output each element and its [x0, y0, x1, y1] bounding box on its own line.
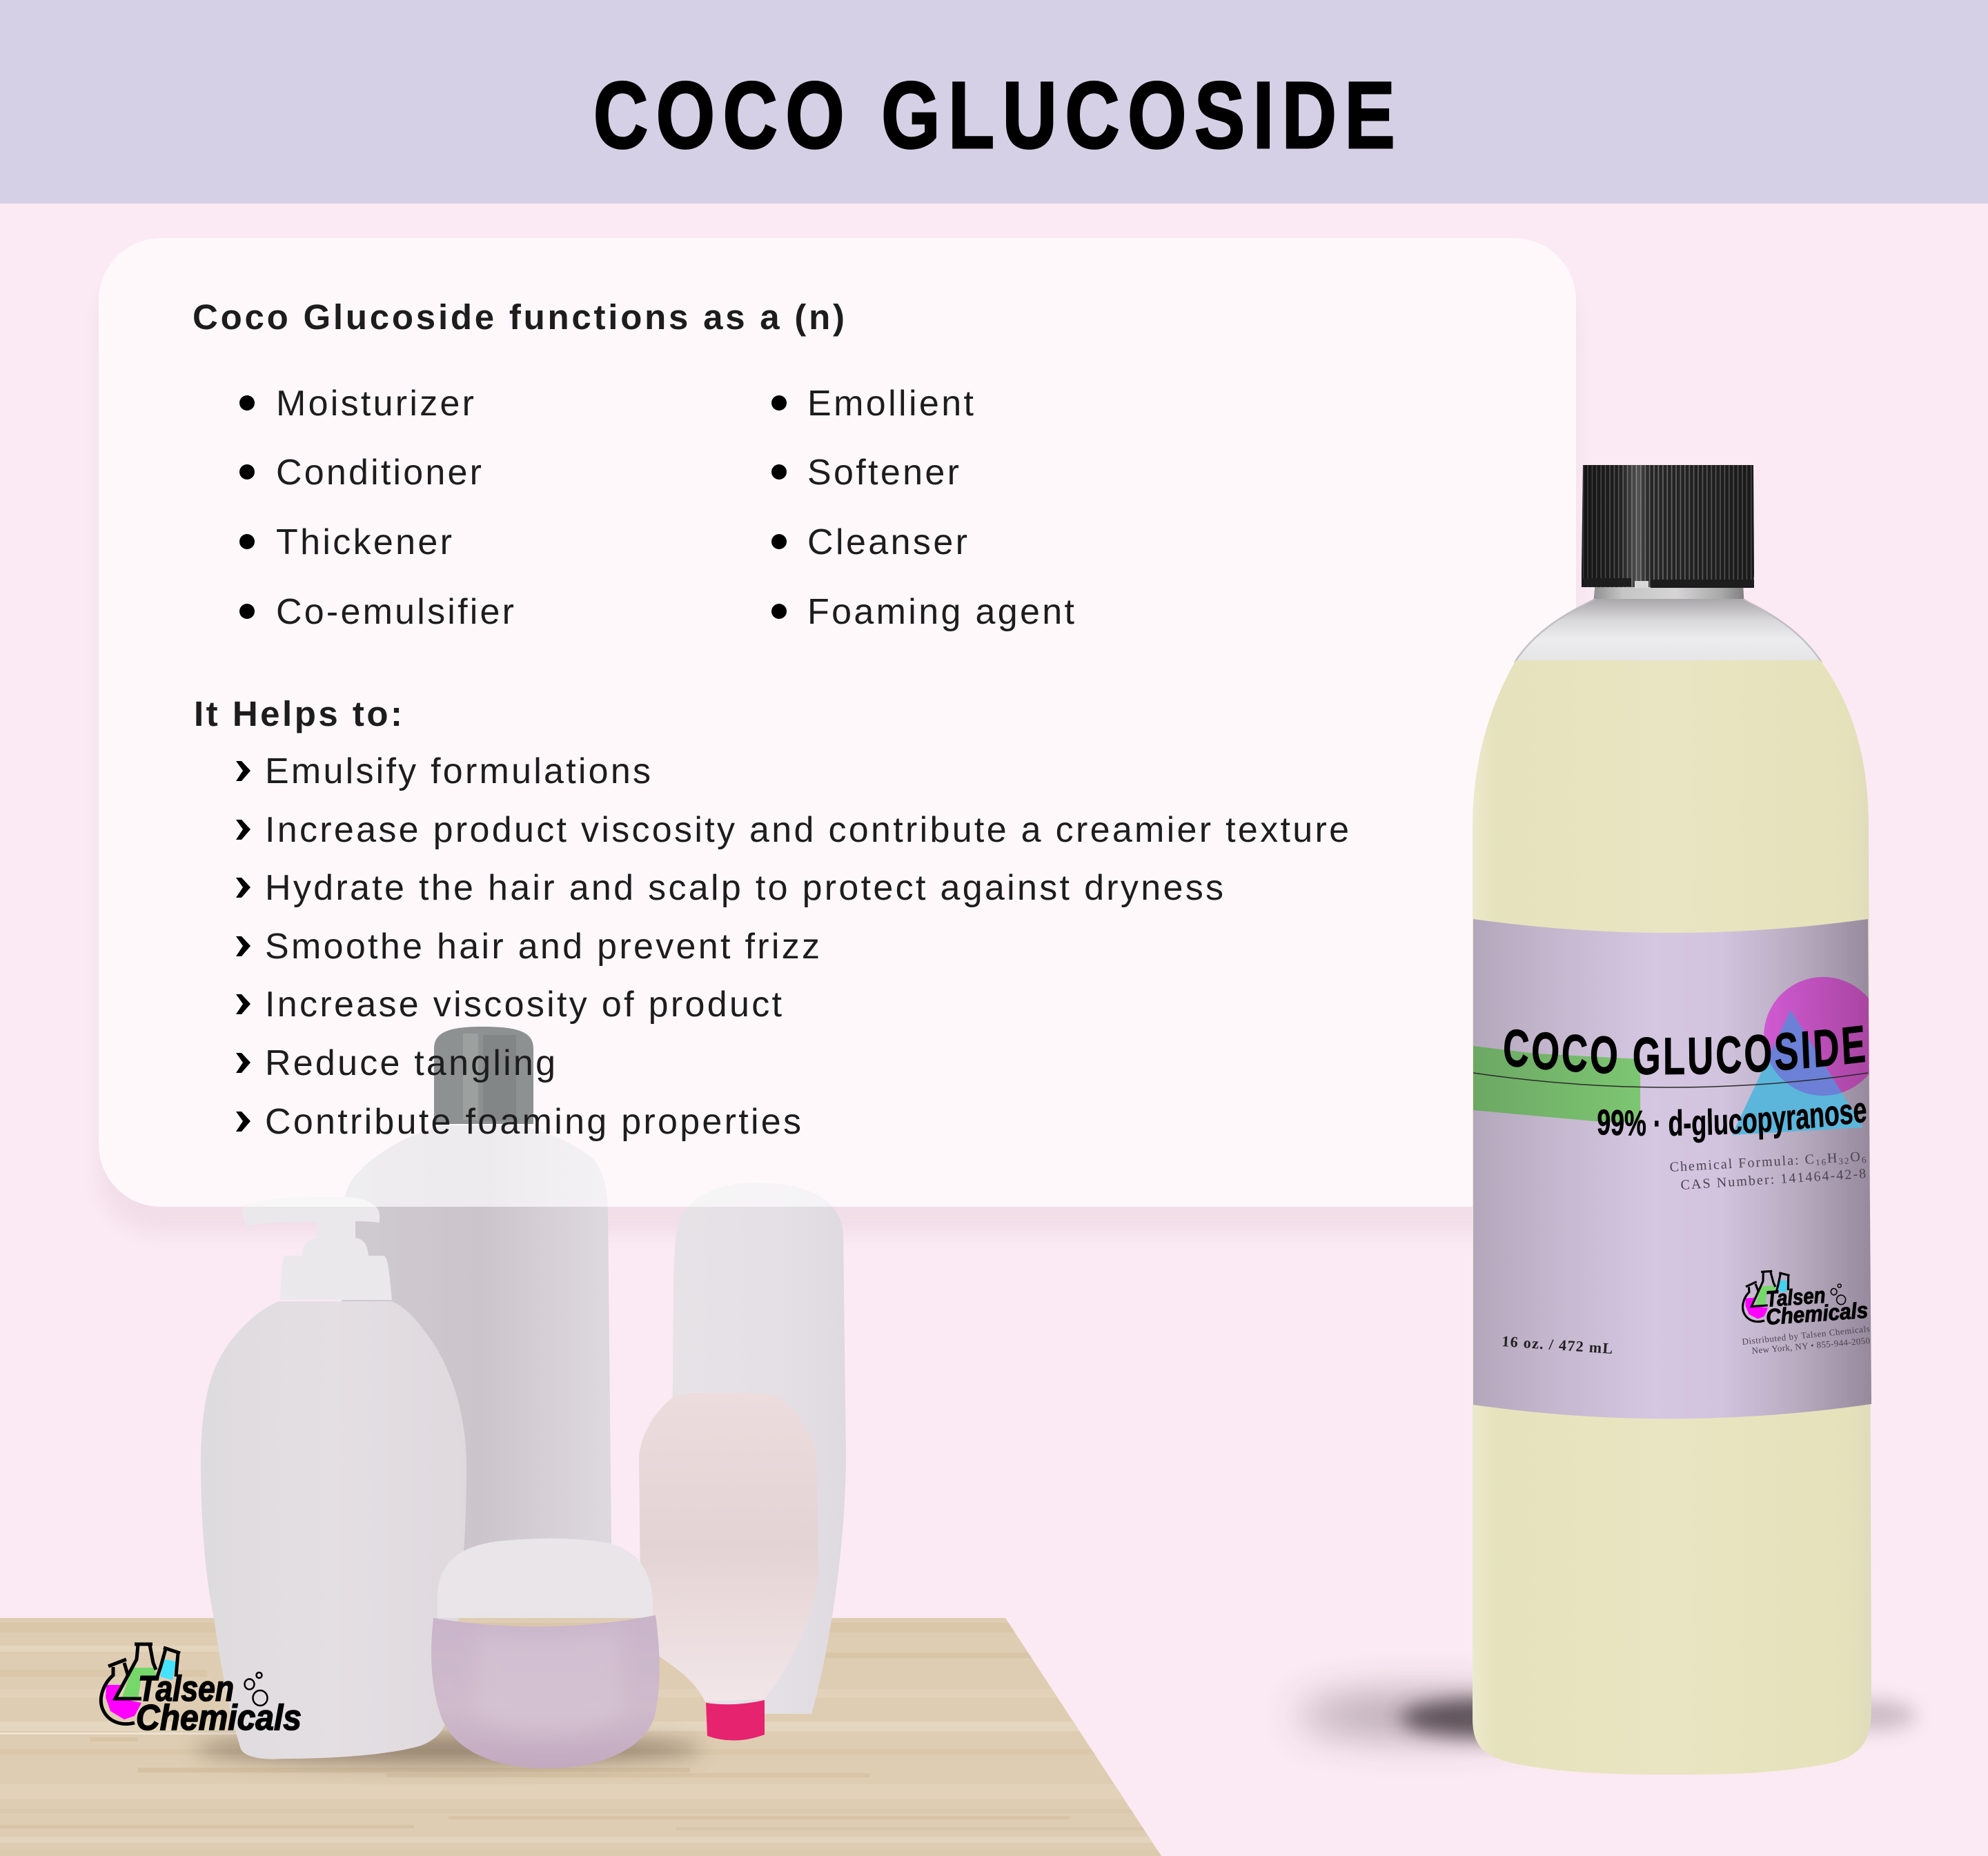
chemical formula: H [1827, 1150, 1838, 1166]
CAS number: CAS Number: 141464-42-8 [1680, 1166, 1867, 1193]
product group: white bottles and jar [201, 1125, 846, 1768]
bullet list: functions column 1: Moisturizer [276, 384, 474, 424]
chevron list: benefits [236, 751, 1349, 1142]
panel: translucent info card [99, 238, 1576, 1207]
chemical formula: 6 [1862, 1154, 1867, 1165]
product label [1473, 919, 1871, 1419]
bottle neck [1593, 583, 1744, 609]
glass shoulder [1514, 598, 1822, 662]
label title: COCO GLUCOSIDE [1504, 1025, 1866, 1075]
pump bottle [201, 1197, 466, 1759]
heading: functions: Coco Glucoside functions as a (n) [193, 297, 845, 337]
main product bottle [1473, 465, 1871, 1775]
net volume: 16 oz. / 472 mL [1502, 1332, 1613, 1357]
chemical formula: Chemical Formula: C [1669, 1152, 1814, 1175]
logo: Talsen Chemicals: Chemicals [136, 1698, 302, 1738]
green band [1473, 1046, 1640, 1123]
chemical formula: 32 [1838, 1155, 1849, 1166]
logo: Talsen Chemicals: Talsen [138, 1669, 234, 1709]
card shadow [104, 1169, 1473, 1230]
bullet list: functions column 2: Foaming agent [807, 592, 1075, 632]
bullet list: functions column 2: Emollient [807, 384, 974, 424]
bullet list: functions column 1 [239, 384, 514, 632]
wooden table [0, 1618, 1173, 1856]
right tube bottle [672, 1183, 846, 1714]
distributor line 1: Distributed by Talsen Chemicals [1742, 1323, 1870, 1347]
heading: it helps to: It Helps to: [194, 694, 402, 733]
tall bottle cap [434, 1027, 533, 1124]
ribbed black cap [1582, 465, 1754, 588]
cosmetic jar [431, 1539, 660, 1768]
label title [1504, 1025, 1866, 1075]
rule line [1473, 1073, 1868, 1087]
chevron list: benefits: Increase viscosity of product [265, 985, 783, 1025]
label logo: Talsen [1765, 1283, 1826, 1312]
label logo: Chemicals [1765, 1298, 1869, 1330]
chevron list: benefits: Emulsify formulations [265, 751, 651, 791]
bullet list: functions column 1: Conditioner [276, 453, 482, 493]
bullet list: functions column 1: Co-emulsifier [276, 592, 514, 632]
label logo [1740, 1265, 1869, 1331]
chevron list: benefits: Reduce tangling [265, 1043, 555, 1083]
bullet list: functions column 2 [771, 384, 1075, 632]
chemical formula: 16 [1815, 1156, 1827, 1167]
bullet list: functions column 2: Cleanser [807, 522, 967, 562]
chevron list: benefits: Contribute foaming properties [265, 1102, 801, 1142]
chevron list: benefits: Hydrate the hair and scalp to protect against dryness [265, 868, 1223, 908]
liquid fill [1470, 660, 1873, 1778]
distributor line 2: New York, NY • 855-944-2050 [1751, 1335, 1871, 1356]
logo: Talsen Chemicals [101, 1644, 302, 1738]
bullet list: functions column 1: Thickener [276, 522, 452, 562]
label subtitle: 99% · d-glucopyranose [1598, 1103, 1867, 1143]
header band [0, 0, 1988, 204]
chevron list: benefits: Increase product viscosity and contribute a creamier texture [265, 810, 1349, 850]
chevron list: benefits: Smoothe hair and prevent frizz [265, 927, 820, 967]
title: COCO GLUCOSIDE [593, 63, 1395, 168]
table shadow under bottles [193, 1734, 704, 1764]
bullet list: functions column 2: Softener [807, 453, 959, 493]
pink inverted bottle [639, 1393, 818, 1741]
main bottle floor shadow [1297, 1695, 1916, 1737]
cyan triangle [1732, 1010, 1863, 1135]
chemical formula: O [1850, 1149, 1860, 1165]
overlap of circle and triangle [1769, 1010, 1842, 1096]
tall bottle body [342, 1125, 618, 1587]
magenta circle [1764, 977, 1869, 1093]
